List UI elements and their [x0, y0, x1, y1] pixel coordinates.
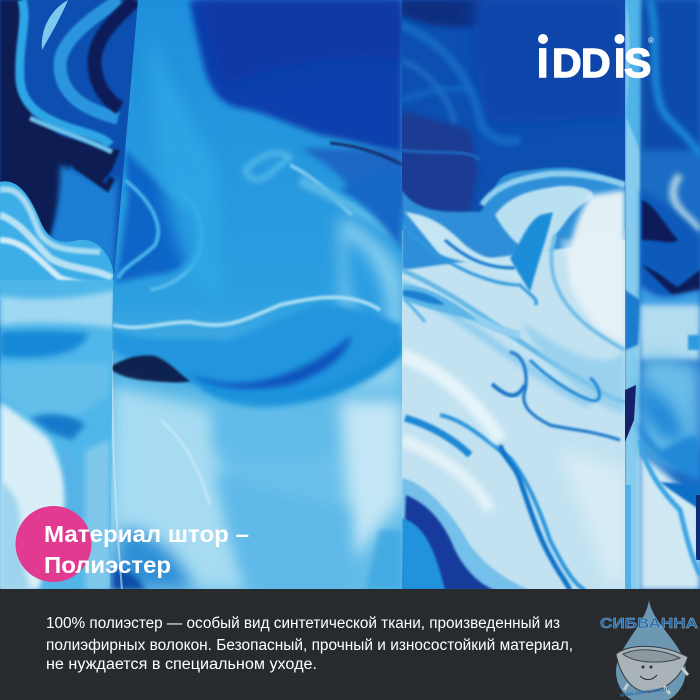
fabric panel: right edge — [625, 0, 700, 590]
logo: IDDIS: IDDIS — [537, 40, 651, 86]
heading badge: pink circle — [16, 506, 92, 582]
logo: IDDIS: ® — [648, 36, 654, 45]
fabric panel: right — [400, 0, 630, 590]
watermark url: www.sibvanna.ru — [618, 686, 669, 699]
heading: material: Полиэстер — [44, 552, 171, 578]
watermark: Sibvanna logo — [600, 600, 698, 700]
dark spot on fabric — [109, 356, 190, 383]
panel: description background — [0, 589, 700, 700]
text block: description: не нуждается в специальном уходе. — [46, 656, 317, 673]
icon: water drop — [616, 600, 686, 700]
text block: description: 100% полиэстер — особый вид синтетической ткани, произведенный из — [46, 615, 560, 632]
icon: smiling bathtub — [616, 646, 688, 694]
heading: material — [44, 521, 249, 578]
text block: description: полиэфирных волокон. Безопасный, прочный и износостойкий материал, — [46, 637, 573, 654]
watermark name: СИБВАННА — [600, 615, 698, 632]
fabric panel: center — [100, 0, 410, 595]
heading: material: Материал штор – — [44, 521, 249, 547]
text block: description — [46, 615, 573, 673]
fabric panel: left fold — [0, 0, 140, 590]
